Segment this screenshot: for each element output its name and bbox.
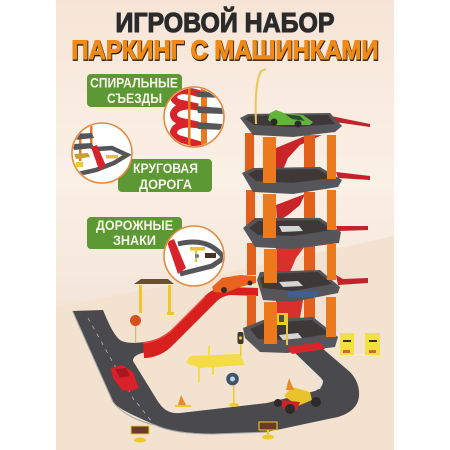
road-side signs	[131, 422, 277, 442]
circle detail: spiral ramps	[164, 87, 224, 148]
green car	[268, 110, 313, 128]
orange car	[212, 275, 256, 293]
title: ПАРКИНГ С МАШИНКАМИ	[72, 35, 378, 65]
callout label: road signs: ДОРОЖНЫЕ	[96, 217, 173, 233]
callout label: road signs: ЗНАКИ	[113, 232, 156, 248]
callout label: ring road	[118, 159, 212, 192]
parking sign	[277, 313, 288, 345]
callout label: spiral ramps: СЪЕЗДЫ	[107, 90, 162, 106]
red car	[111, 365, 139, 391]
title: ИГРОВОЙ НАБОР	[116, 7, 334, 38]
side exit ramps	[326, 115, 370, 285]
yellow gas pumps	[340, 333, 380, 356]
title	[72, 7, 379, 66]
traffic cones	[175, 378, 294, 407]
back columns	[245, 133, 315, 330]
circle detail: ring road	[72, 123, 132, 183]
red entry to tower	[287, 342, 325, 354]
front columns	[263, 135, 336, 344]
callout label: ring road: ДОРОГА	[139, 176, 192, 192]
parking tower	[240, 113, 370, 353]
roundabout sign	[226, 373, 239, 407]
traffic light	[238, 332, 244, 356]
red ramp	[143, 287, 258, 358]
callout label: spiral ramps: СПИРАЛЬНЫЕ	[90, 74, 178, 90]
callout label: spiral ramps	[87, 74, 182, 107]
street lamp	[256, 69, 266, 124]
callout label: ring road: КРУГОВАЯ	[133, 160, 198, 176]
gate sign	[134, 279, 174, 315]
callout label: road signs	[87, 217, 182, 249]
floors	[240, 113, 342, 353]
red spiral ramps inside tower	[276, 135, 322, 322]
quad bike	[274, 387, 321, 414]
title: ПАРКИНГ С МАШИНКАМИ	[72, 36, 379, 66]
stop sign	[130, 315, 141, 343]
yellow sprue of signs	[186, 346, 245, 382]
road track	[72, 310, 359, 434]
background panel	[56, 0, 394, 450]
circle detail: road signs	[164, 226, 224, 286]
